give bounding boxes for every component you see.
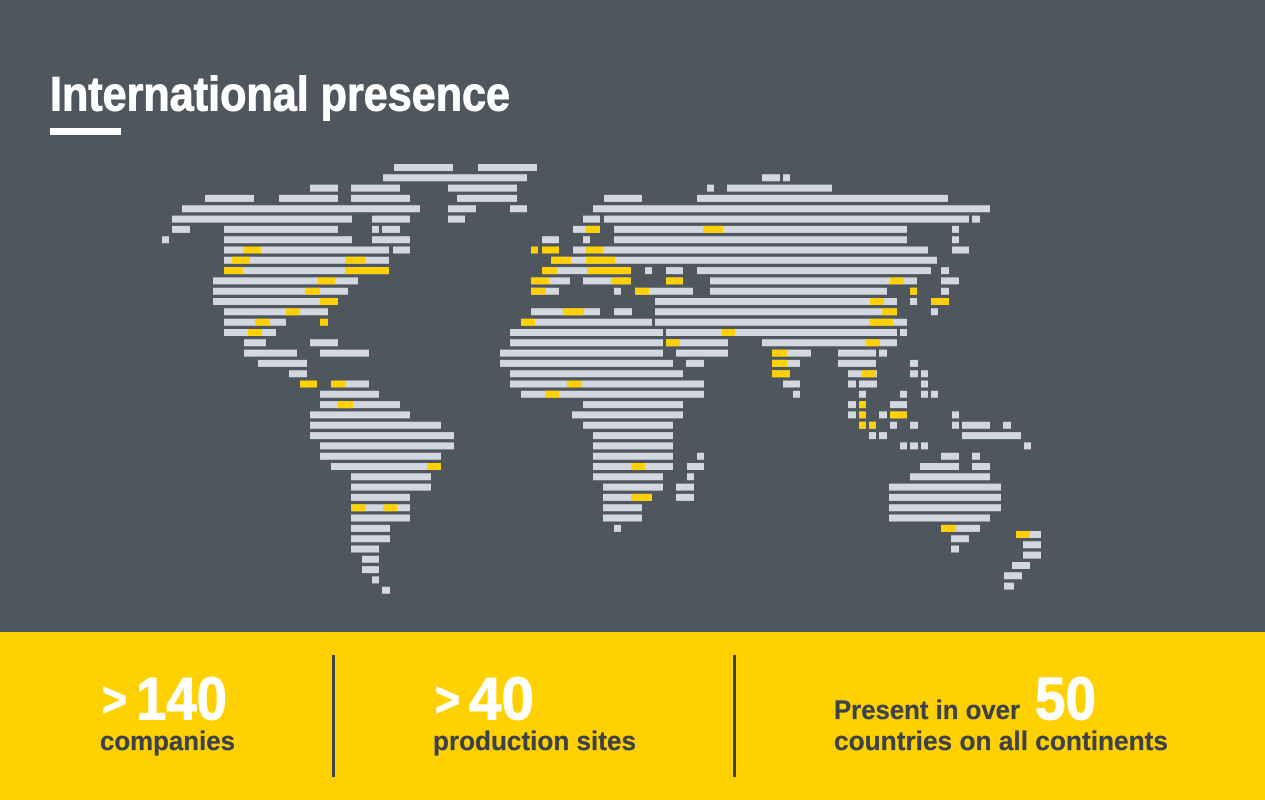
- map: Africa: [500, 308, 704, 532]
- stat: companies: 140: [136, 666, 227, 732]
- map: Madagascar: [676, 453, 704, 501]
- stat: companies: [100, 666, 235, 756]
- title: International presence: [50, 68, 510, 122]
- stat: countries: Present in over: [834, 695, 1020, 725]
- stat: production sites: >: [435, 674, 460, 727]
- stat: production sites: [433, 666, 636, 756]
- markers: Africa sites: [521, 308, 652, 501]
- divider: [332, 655, 335, 777]
- markers: Eurasia sites: [531, 226, 949, 429]
- map: Australia: [889, 453, 1001, 552]
- stat: production sites: 40: [469, 666, 534, 732]
- stat: countries: [834, 666, 1168, 756]
- markers: South America sites: [331, 380, 441, 511]
- map: New Zealand: [1004, 531, 1041, 590]
- markers: North America sites: [224, 246, 389, 388]
- title underline: [50, 128, 121, 135]
- stat: countries: countries on all continents: [834, 726, 1168, 756]
- stat: companies: >: [102, 674, 127, 727]
- map: North America: [162, 185, 420, 377]
- map: South America: [310, 380, 454, 594]
- stats band: [0, 632, 1265, 800]
- world map: [162, 164, 1041, 594]
- map: Greenland: [383, 164, 537, 223]
- markers: Australia site: [941, 525, 956, 532]
- markers: New Zealand site: [1016, 531, 1030, 538]
- stat: companies: companies: [100, 726, 235, 756]
- divider: [733, 655, 736, 777]
- map: Eurasia: [531, 174, 1031, 449]
- stat: production sites: production sites: [433, 726, 636, 756]
- stat: countries: 50: [1035, 666, 1096, 732]
